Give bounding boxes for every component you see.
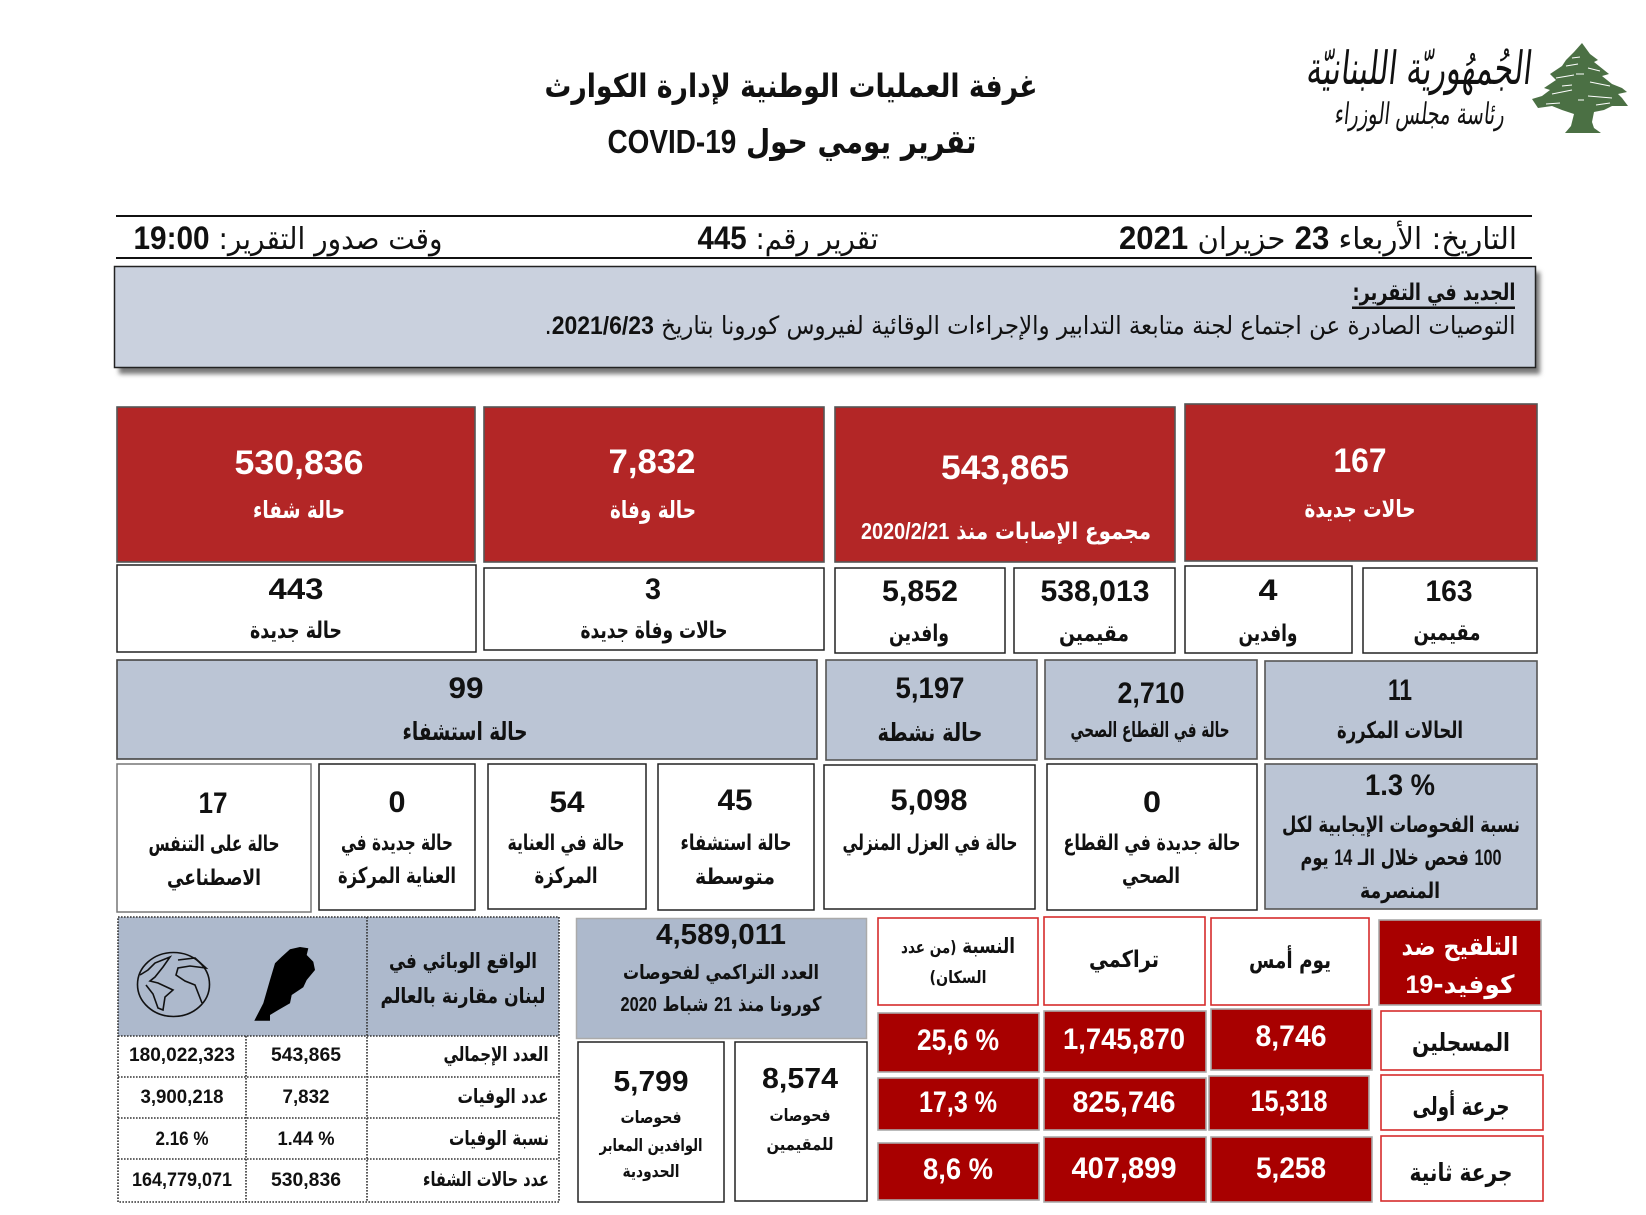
card: new health sector xyxy=(1047,764,1257,910)
card: resident tests: فحوصات xyxy=(770,1106,830,1126)
title: تقرير يومي حول COVID-19 xyxy=(608,122,976,162)
card: home isolation: حالة في العزل المنزلي xyxy=(842,831,1018,856)
card: ICU: 54 xyxy=(550,786,585,819)
card: total residents xyxy=(1014,568,1175,653)
card: ventilated xyxy=(117,764,311,912)
report number: تقرير رقم: 445 xyxy=(698,220,878,257)
panel: cumulative tests: العدد التراكمي لفحوصات xyxy=(623,960,819,985)
panel: repeated cases xyxy=(1265,661,1537,759)
logo: Lebanese Republic presidency of council of ministers xyxy=(1304,41,1628,133)
panel: cumulative tests xyxy=(576,918,866,1038)
panel: active: 5,197 xyxy=(896,672,964,705)
row: recoveries: 164,779,071 xyxy=(132,1170,232,1191)
card: moderate hospital cases: حالة استشفاء xyxy=(680,831,792,856)
panel: total cases: 543,865 xyxy=(941,449,1069,487)
row: death rate: 2.16 % xyxy=(156,1129,209,1150)
card: new health sector: الصحي xyxy=(1122,864,1180,889)
row: registered: 1,745,870 xyxy=(1063,1023,1185,1056)
date: التاريخ: الأربعاء 23 حزيران 2021 xyxy=(1119,219,1517,257)
row: second dose: 407,899 xyxy=(1072,1152,1176,1185)
panel: recovered xyxy=(117,407,475,562)
panel: deaths: 7,832 xyxy=(608,443,696,481)
card: ICU: المركزة xyxy=(534,864,598,889)
panel: total cases: مجموع الإصابات منذ 2020/2/21 xyxy=(861,518,1151,545)
icon: globe xyxy=(138,952,210,1016)
panel: hospitalised xyxy=(117,660,817,759)
card: moderate hospital cases xyxy=(658,764,814,910)
panel: new cases xyxy=(1185,404,1537,561)
row: second dose: 8,6 % xyxy=(923,1153,993,1186)
card: ICU: حالة في العناية xyxy=(508,831,624,856)
panel: repeated cases: الحالات المكررة xyxy=(1337,718,1463,744)
row: deaths xyxy=(140,1084,548,1108)
card: moderate hospital cases: 45 xyxy=(718,784,752,817)
panel: deaths: حالة وفاة xyxy=(610,496,696,524)
panel: active xyxy=(826,660,1037,760)
panel: repeated cases: 11 xyxy=(1388,674,1412,707)
card: total arrivals xyxy=(835,568,1005,653)
card: new deaths: حالات وفاة جديدة xyxy=(580,618,728,644)
row: registered: 25,6 % xyxy=(917,1024,999,1057)
panel: positivity rate: المنصرمة xyxy=(1360,879,1440,904)
calligraphy xyxy=(1304,41,1535,132)
card: new arrivals xyxy=(1185,566,1352,653)
row: death rate: نسبة الوفيات xyxy=(449,1126,549,1150)
card: new health sector: حالة جديدة في القطاع xyxy=(1064,831,1240,856)
row: first dose: 17,3 % xyxy=(919,1086,997,1119)
panel: deaths xyxy=(484,407,824,562)
card: ventilated: حالة على التنفس xyxy=(148,832,280,857)
panel: hospitalised: 99 xyxy=(448,672,484,705)
panel: positivity rate: 1.3 % xyxy=(1365,769,1435,802)
row: first dose: جرعة أولى xyxy=(1412,1090,1510,1122)
panel: recovered: 530,836 xyxy=(234,444,364,482)
card: resident tests: 8,574 xyxy=(762,1063,838,1095)
row: registered xyxy=(878,1009,1541,1072)
column: population share: السكان) xyxy=(930,968,986,988)
row: second dose xyxy=(878,1136,1543,1202)
row: recoveries xyxy=(132,1167,549,1191)
column: cumulative xyxy=(1044,917,1205,1005)
calligraphy: الجُمهُوريّة اللبنانيّة xyxy=(1304,41,1535,96)
calligraphy: رئاسة مجلس الوزراء xyxy=(1333,97,1507,132)
row: total xyxy=(129,1042,548,1067)
row: deaths: 3,900,218 xyxy=(140,1087,224,1108)
panel: cumulative tests: كورونا منذ 21 شباط 2020 xyxy=(620,992,822,1016)
table header: لبنان مقارنة بالعالم xyxy=(380,984,546,1008)
column: population share: النسبة (من عدد xyxy=(901,934,1015,958)
panel: vaccination xyxy=(878,917,1543,1202)
card: arrival tests: الحدودية xyxy=(622,1162,680,1182)
row: recoveries: عدد حالات الشفاء xyxy=(423,1167,549,1191)
card: arrival tests: 5,799 xyxy=(614,1066,688,1098)
card: total arrivals: وافدين xyxy=(889,621,949,647)
panel: health sector xyxy=(1045,660,1257,759)
row: death rate xyxy=(156,1126,549,1150)
card: new arrivals: وافدين xyxy=(1238,621,1298,647)
table header: الواقع الوبائي في xyxy=(389,949,537,973)
panel: positivity rate: نسبة الفحوصات الإيجابية لكل xyxy=(1282,813,1520,838)
panel: active: حالة نشطة xyxy=(878,718,982,747)
card: new recoveries: 443 xyxy=(268,573,324,606)
table header xyxy=(118,917,559,1036)
card: new residents xyxy=(1363,568,1537,653)
card: arrival tests: الوافدين المعابر xyxy=(599,1136,702,1156)
report info bar xyxy=(116,215,1532,259)
table: Lebanon vs world xyxy=(118,917,559,1202)
row: registered: 8,746 xyxy=(1256,1020,1326,1053)
panel: positivity rate xyxy=(1265,764,1537,909)
card: new ICU: حالة جديدة في xyxy=(341,831,453,856)
card: new ICU: 0 xyxy=(388,786,406,819)
column: yesterday xyxy=(1211,918,1369,1005)
row: total: 180,022,323 xyxy=(129,1045,235,1066)
vaccination heading: كوفيد-19 xyxy=(1406,970,1515,1000)
card: new residents: مقيمين xyxy=(1414,620,1480,646)
row: first dose xyxy=(878,1075,1543,1130)
card: total residents: مقيمين xyxy=(1059,621,1129,647)
card: new recoveries xyxy=(117,565,476,652)
row: total: العدد الإجمالي xyxy=(444,1042,548,1067)
card: moderate hospital cases: متوسطة xyxy=(695,865,775,890)
panel: new cases: حالات جديدة xyxy=(1304,495,1416,523)
row: deaths: 7,832 xyxy=(282,1087,330,1108)
heading: الجديد في التقرير: xyxy=(1352,280,1516,306)
column: cumulative: تراكمي xyxy=(1089,947,1159,973)
row: death rate: 1.44 % xyxy=(278,1129,335,1150)
row: first dose: 15,318 xyxy=(1250,1085,1328,1118)
panel: health sector: 2,710 xyxy=(1118,677,1184,710)
row: registered: المسجلين xyxy=(1412,1028,1510,1058)
row: second dose: 5,258 xyxy=(1256,1152,1326,1185)
card: home isolation: 5,098 xyxy=(890,784,968,817)
row: first dose: 825,746 xyxy=(1072,1086,1176,1119)
card: arrival tests xyxy=(578,1042,724,1202)
card: new health sector: 0 xyxy=(1143,786,1161,819)
vaccination heading xyxy=(1379,920,1541,1005)
card: new residents: 163 xyxy=(1426,575,1472,608)
card: ventilated: 17 xyxy=(198,787,228,820)
panel: hospitalised: حالة استشفاء xyxy=(402,717,528,746)
panel: new cases: 167 xyxy=(1334,442,1386,480)
text block: التوصيات الصادرة عن اجتماع لجنة متابعة التدابير والإجراءات الوقائية لفيروس كورونا بتاريخ 2021/6/23. xyxy=(545,311,1516,341)
panel: total cases xyxy=(835,407,1175,562)
panel: health sector: حالة في القطاع الصحي xyxy=(1070,718,1230,742)
card: new ICU xyxy=(319,764,475,910)
card: resident tests xyxy=(735,1042,867,1201)
title: غرفة العمليات الوطنية لإدارة الكوارث xyxy=(544,67,1038,105)
card: new arrivals: 4 xyxy=(1258,574,1278,607)
title xyxy=(544,67,1038,162)
panel: recovered: حالة شفاء xyxy=(253,496,345,524)
grid lines xyxy=(118,917,559,1202)
column: population share xyxy=(878,918,1038,1005)
card: new deaths: 3 xyxy=(645,573,661,606)
card: resident tests: للمقيمين xyxy=(766,1135,834,1155)
card: ventilated: الاصطناعي xyxy=(167,866,261,891)
card: arrival tests: فحوصات xyxy=(620,1108,682,1128)
icon: cedar tree xyxy=(1532,43,1628,133)
column: yesterday: يوم أمس xyxy=(1249,944,1331,974)
vaccination heading: التلقيح ضد xyxy=(1402,932,1518,962)
card: ICU xyxy=(488,764,646,909)
panel: new in report xyxy=(114,266,1540,374)
panel: positivity rate: 100 فحص خلال الـ 14 يوم xyxy=(1300,845,1502,871)
card: new recoveries: حالة جديدة xyxy=(250,618,342,644)
row: deaths: عدد الوفيات xyxy=(458,1084,548,1108)
card: new deaths xyxy=(484,568,824,650)
row: recoveries: 530,836 xyxy=(271,1170,341,1191)
card: home isolation xyxy=(824,765,1035,909)
card: new ICU: العناية المركزة xyxy=(338,864,456,889)
icon: Lebanon map xyxy=(254,947,315,1021)
panel: cumulative tests: 4,589,011 xyxy=(656,919,786,951)
card: total residents: 538,013 xyxy=(1040,575,1150,608)
report time: وقت صدور التقرير: 19:00 xyxy=(133,220,442,257)
card: total arrivals: 5,852 xyxy=(882,575,958,608)
row: second dose: جرعة ثانية xyxy=(1410,1158,1512,1188)
row: total: 543,865 xyxy=(271,1045,341,1066)
